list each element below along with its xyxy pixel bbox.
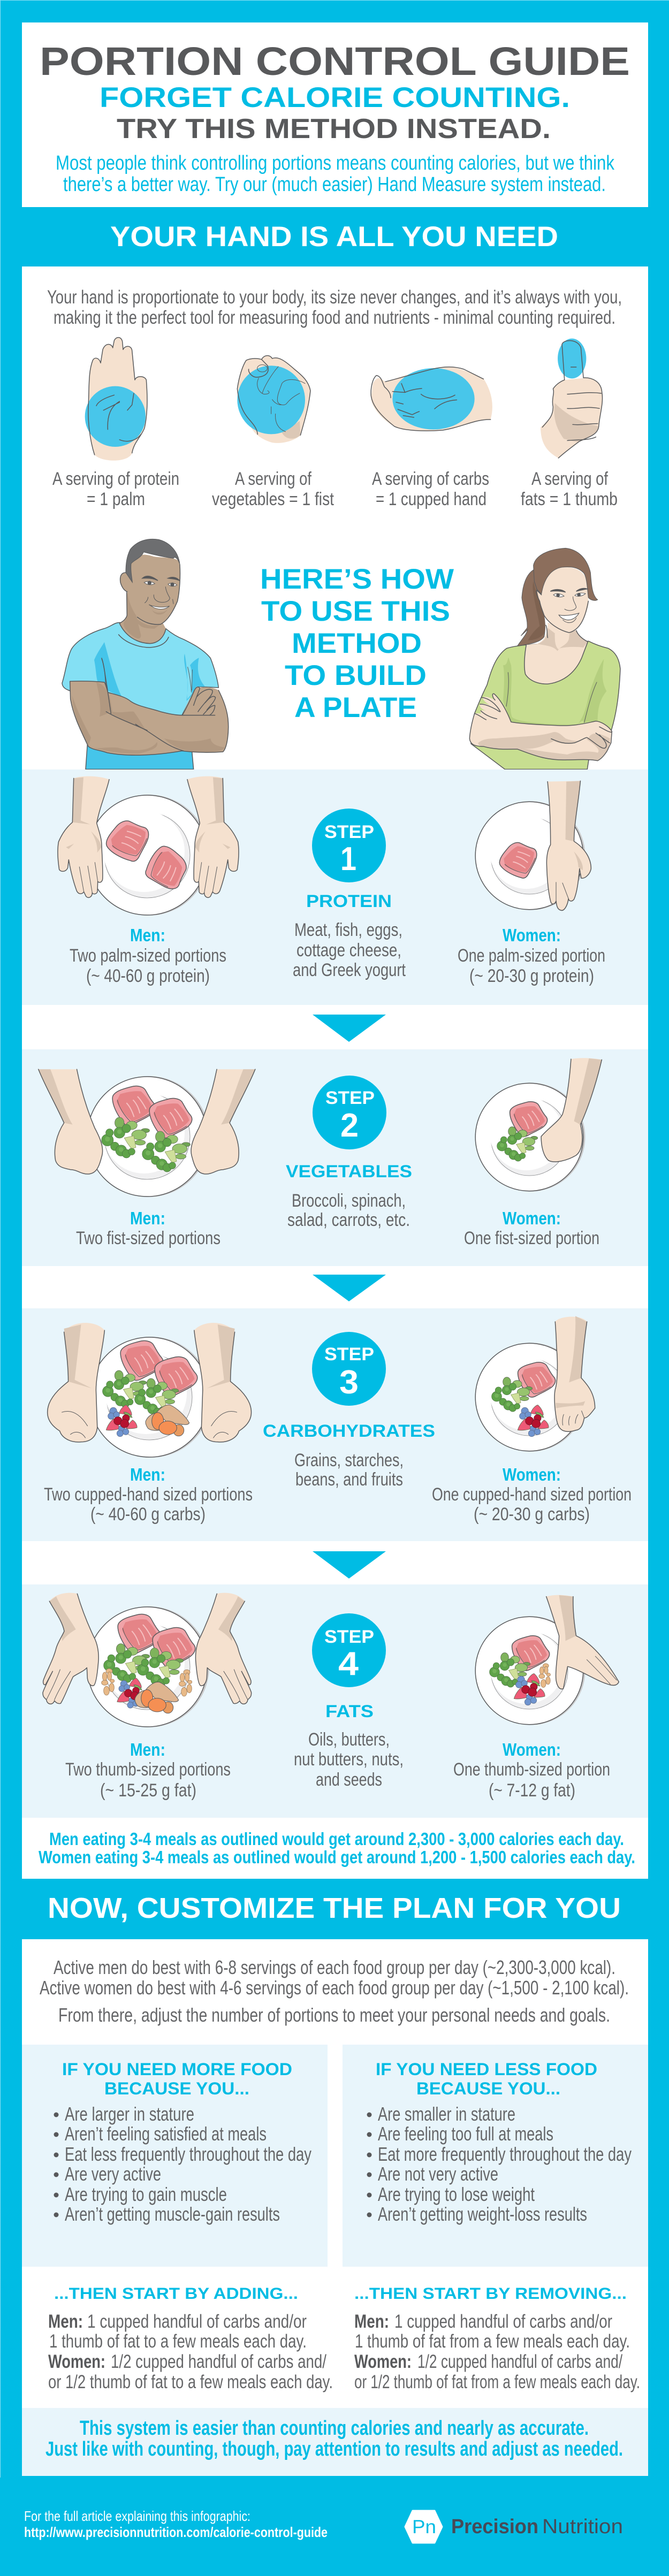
fat foods [294,1729,404,1790]
illustration: women's plate with one fist portion [475,1058,602,1192]
footer source text [24,2508,328,2540]
men's carbohydrate portion: Two cupped-hand sized portions [44,1484,253,1505]
step badge 1: STEP [324,822,374,842]
adding instructions: 1 cupped handful of carbs and/or [87,2311,307,2332]
women's protein portion [458,925,605,986]
reasons list: less food: Are feeling too full at meals [378,2123,553,2145]
step name: protein: PROTEIN [306,891,392,911]
men's protein portion: Two palm-sized portions [70,946,226,966]
step name: carbohydrates: CARBOHYDRATES [263,1421,435,1441]
adding instructions: 1 thumb of fat to a few meals each day. [49,2331,307,2352]
reasons list: more food: Are larger in stature [65,2103,194,2125]
caption: fats: fats = 1 thumb [521,489,618,509]
adding instructions: Women: [48,2351,105,2372]
men's fat portion: Two thumb-sized portions [65,1759,231,1780]
step badge 2 [313,1076,386,1149]
panel: title header [22,22,648,207]
women's fat portion: (~ 7-12 g fat) [489,1780,575,1801]
caption: protein [52,469,179,509]
men's protein portion [70,925,226,986]
carbohydrate foods [294,1450,404,1490]
wordmark: Nutrition [542,2516,623,2538]
heading: then start by removing: ...THEN START BY REMOVING... [354,2285,627,2303]
subtitle line 2: TRY THIS METHOD INSTEAD. [117,113,551,144]
arrow 2 [313,1275,386,1301]
men's carbohydrate portion: (~ 40-60 g carbs) [90,1504,206,1525]
men's vegetable portion: Men: [130,1208,165,1228]
caption: carbs: A serving of carbs [372,469,489,489]
panel: customize section [22,1939,648,2476]
caption: vegetables [212,469,334,509]
protein foods: and Greek yogurt [293,960,406,980]
fat foods: nut butters, nuts, [294,1749,404,1770]
illustration: woman with crossed arms [469,548,620,769]
heading: need less food: IF YOU NEED LESS FOOD [376,2060,597,2079]
step badge 1 [312,809,386,882]
reasons list: less food: Aren’t getting weight-loss results [378,2203,587,2225]
heading: your hand is all you need: YOUR HAND IS ALL YOU NEED [110,221,558,253]
protein foods [293,920,406,980]
vegetable foods: salad, carrots, etc. [287,1210,410,1230]
icon: palm hand [85,338,147,461]
icon: Pn hexagon [405,2511,442,2543]
heading: now, customize the plan for you: NOW, CUSTOMIZE THE PLAN FOR YOU [48,1892,621,1924]
icon: thumb [541,339,603,458]
step badge 4: STEP [324,1627,374,1647]
icon: cupped hand [371,367,492,431]
caption: carbs [372,469,489,509]
reasons list: more food: Aren’t getting muscle-gain results [65,2203,280,2225]
intro text [56,152,615,196]
caption: protein: = 1 palm [87,489,145,509]
women's protein portion: One palm-sized portion [458,946,605,966]
hand intro text [47,287,622,328]
heading: need more food [62,2060,292,2098]
panel: step 3 carbohydrates [22,1308,648,1541]
carbohydrate foods: beans, and fruits [295,1469,403,1490]
reasons list: more food: Aren’t feeling satisfied at meals [65,2123,267,2145]
adding instructions: 1/2 cupped handful of carbs and/ [111,2351,326,2372]
reasons list: more food: Are very active [65,2163,161,2185]
heading: need less food [376,2060,597,2098]
step badge 4: 4 [338,1645,359,1682]
reasons list: more food: Eat less frequently throughout the day [65,2143,311,2165]
illustration: men's plate with two palm portions [58,776,239,916]
arrow 3 [313,1551,386,1579]
wordmark [451,2516,623,2538]
panel: step 1 protein [22,769,648,1005]
step name: vegetables: VEGETABLES [286,1162,412,1181]
adding instructions: or 1/2 thumb of fat to a few meals each day. [48,2372,333,2392]
removing instructions [354,2311,640,2392]
caption: fats [521,469,618,509]
panel: need more food [22,2045,328,2267]
illustration: man with crossed arms [62,539,229,769]
illustration: women's plate with one cupped-hand portion [475,1316,595,1452]
step badge 2: STEP [325,1088,375,1108]
men's fat portion [65,1740,231,1801]
adding instructions: Men: [48,2311,83,2332]
panel: step 4 fats [22,1584,648,1818]
logo: Precision Nutrition [405,2511,623,2543]
heading: need more food: IF YOU NEED MORE FOOD [62,2060,292,2079]
men's fat portion: (~ 15-25 g fat) [100,1780,196,1801]
removing instructions: 1 cupped handful of carbs and/or [394,2311,612,2332]
men's vegetable portion: Two fist-sized portions [76,1228,221,1248]
women's fat portion [453,1740,610,1801]
vegetable foods: Broccoli, spinach, [292,1191,406,1211]
step badge 3 [312,1332,386,1406]
caption: protein: A serving of protein [52,469,179,489]
reasons list: less food: Are smaller in stature [378,2103,515,2125]
step badge 3: 3 [339,1364,359,1401]
icon: fist [237,356,310,443]
heading: here's how to use this method [260,563,454,723]
women's vegetable portion: One fist-sized portion [464,1228,599,1248]
men's vegetable portion [76,1208,221,1248]
reasons list: less food: Are not very active [378,2163,498,2185]
step name: fats: FATS [325,1702,374,1721]
servings text [40,1956,629,2026]
men's protein portion: Men: [130,925,165,945]
heading: need less food: BECAUSE YOU... [416,2079,560,2098]
heading: here's how to use this method: METHOD [292,628,422,659]
illustration: men's plate with two thumb portions [43,1593,252,1727]
women's protein portion: Women: [503,925,561,945]
panel: step 2 vegetables [22,1049,648,1266]
protein foods: Meat, fish, eggs, [294,920,402,940]
women's carbohydrate portion: Women: [503,1465,561,1484]
step badge 4 [312,1613,386,1687]
caption: fats: A serving of [531,469,608,489]
women's fat portion: Women: [503,1740,561,1759]
arrow 1 [313,1015,386,1042]
illustration: women's plate with one palm portion [475,781,591,910]
wordmark: Precision [451,2516,538,2538]
hand measure captions [52,469,618,509]
icon: Pn hexagon: Pn [412,2517,436,2537]
illustration: women's plate with one thumb portion [475,1595,619,1725]
subtitle line 1: FORGET CALORIE COUNTING. [100,82,570,113]
heading: here's how to use this method: TO USE THIS [261,596,450,627]
title: PORTION CONTROL GUIDE [40,39,630,83]
removing instructions: Women: [354,2351,412,2372]
men's carbohydrate portion: Men: [130,1465,165,1484]
vegetable foods [287,1191,410,1230]
calorie summary callout [39,1829,635,1867]
caption: vegetables: vegetables = 1 fist [212,489,334,509]
caption: carbs: = 1 cupped hand [376,489,486,509]
heading: here's how to use this method: TO BUILD [285,660,427,691]
heading: here's how to use this method: HERE’S HOW [260,563,454,595]
protein foods: cottage cheese, [297,940,401,961]
fat foods: and seeds [316,1770,382,1790]
closing callout [22,2408,648,2476]
men's fat portion: Men: [130,1740,165,1759]
women's fat portion: One thumb-sized portion [453,1759,610,1780]
reasons list: less food: Are trying to lose weight [378,2183,535,2205]
adding instructions [48,2311,333,2392]
removing instructions: Men: [354,2311,389,2332]
heading: need more food: BECAUSE YOU... [104,2079,249,2098]
reasons list: more food [54,2103,311,2225]
illustration: men's plate with two fist portions [39,1069,255,1197]
women's protein portion: (~ 20-30 g protein) [469,966,594,986]
footer source text: For the full article explaining this infographic: [24,2508,250,2524]
heading: then start by adding: ...THEN START BY ADDING... [54,2285,298,2303]
women's vegetable portion: Women: [503,1208,561,1228]
women's carbohydrate portion: (~ 20-30 g carbs) [474,1504,590,1525]
panel: need less food [343,2045,648,2267]
women's carbohydrate portion [432,1465,632,1525]
men's protein portion: (~ 40-60 g protein) [86,966,210,986]
women's vegetable portion [464,1208,599,1248]
step badge 1: 1 [340,841,356,878]
step badge 2: 2 [340,1107,359,1144]
reasons list: more food: Are trying to gain muscle [65,2183,227,2205]
heading: here's how to use this method: A PLATE [294,692,417,723]
carbohydrate foods: Grains, starches, [294,1450,404,1470]
men's carbohydrate portion [44,1465,253,1525]
reasons list: less food [367,2103,632,2225]
panel: main white section [22,266,648,1879]
illustration: men's plate with two cupped-hand portions [48,1323,252,1458]
step badge 3: STEP [324,1344,374,1365]
fat foods: Oils, butters, [308,1729,390,1750]
footer source text: http://www.precisionnutrition.com/calorie-control-guide [24,2524,328,2540]
caption: vegetables: A serving of [235,469,311,489]
